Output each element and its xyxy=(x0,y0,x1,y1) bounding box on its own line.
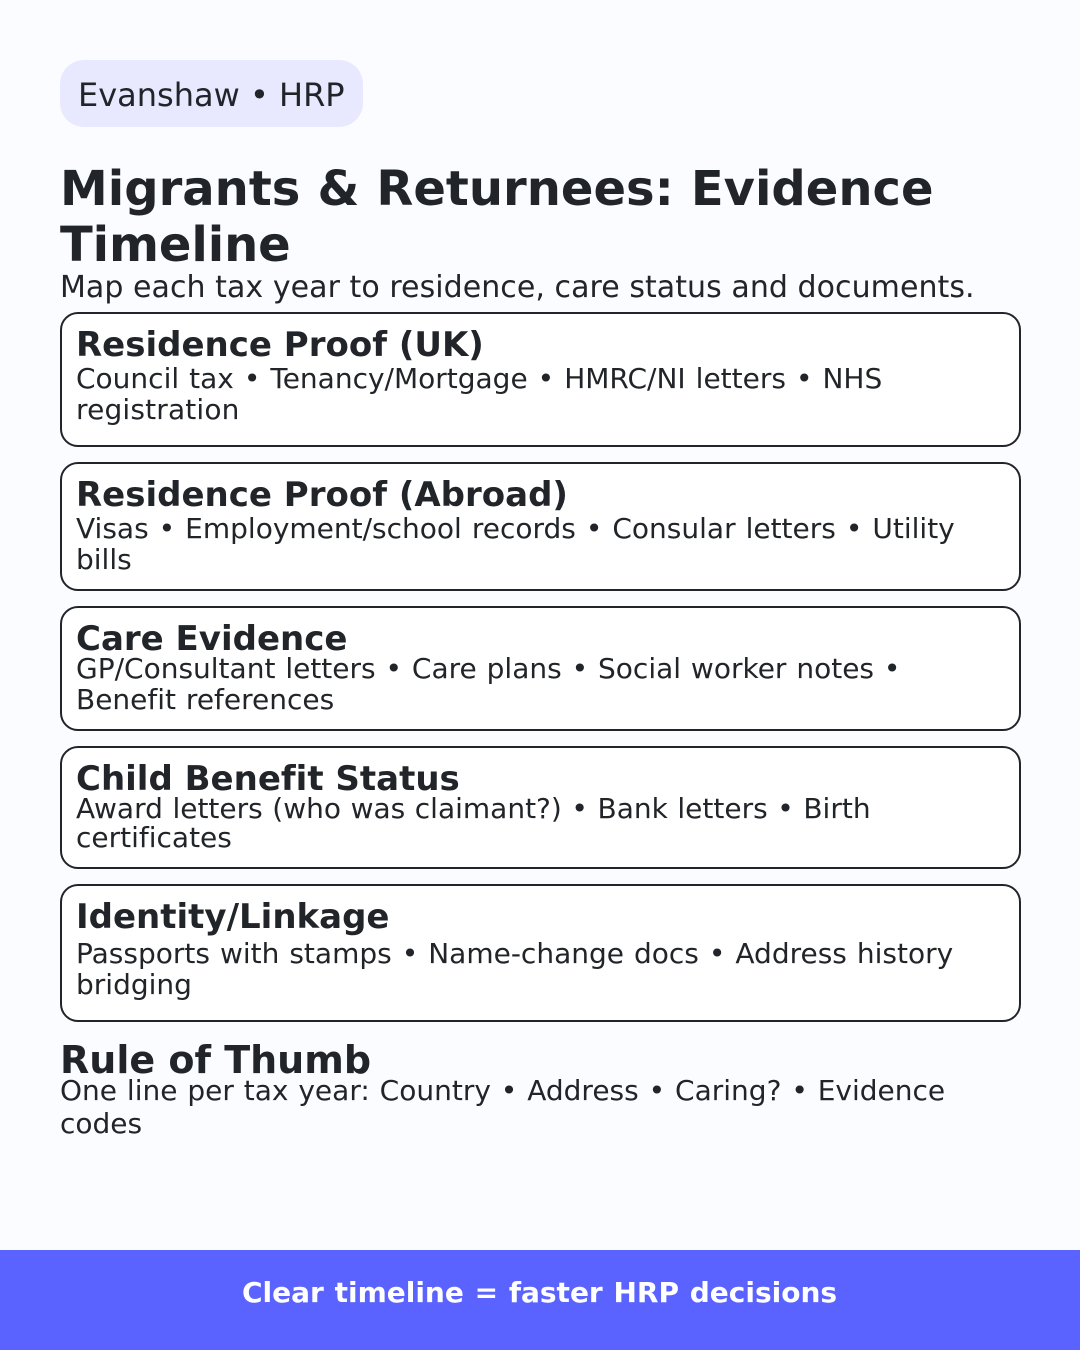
title xyxy=(60,161,934,273)
text: rule of thumb: One line per tax year: Country • Address • Caring? • Evidence xyxy=(60,1074,945,1107)
badge: Evanshaw • HRP xyxy=(78,76,345,114)
panel: identity linkage xyxy=(60,884,1021,1022)
text: care evidence: GP/Consultant letters • Care plans • Social worker notes • xyxy=(76,652,900,685)
heading: rule of thumb: Rule of Thumb xyxy=(60,1038,371,1082)
text: identity linkage xyxy=(76,937,953,1001)
panel: care evidence xyxy=(60,606,1021,731)
title: Migrants & Returnees: Evidence xyxy=(60,161,934,217)
heading: care evidence: Care Evidence xyxy=(76,619,347,659)
text: care evidence xyxy=(76,652,900,716)
badge xyxy=(60,60,363,127)
heading: identity linkage: Identity/Linkage xyxy=(76,897,389,937)
heading: child benefit status: Child Benefit Status xyxy=(76,759,460,799)
text: residence proof UK: Council tax • Tenancy/Mortgage • HMRC/NI letters • NHS xyxy=(76,362,882,395)
text: residence proof UK: registration xyxy=(76,393,240,426)
text: child benefit status: Award letters (who was claimant?) • Bank letters • Birth xyxy=(76,792,871,825)
footer banner: Clear timeline = faster HRP decisions xyxy=(242,1276,837,1309)
text: rule of thumb xyxy=(60,1074,945,1140)
text: residence proof abroad: bills xyxy=(76,543,132,576)
panel: child benefit status xyxy=(60,746,1021,869)
heading: residence proof UK: Residence Proof (UK) xyxy=(76,325,484,365)
text: residence proof UK xyxy=(76,362,882,426)
subtitle: Map each tax year to residence, care status and documents. xyxy=(60,270,975,305)
heading: residence proof abroad: Residence Proof (Abroad) xyxy=(76,475,568,515)
text: residence proof abroad xyxy=(76,512,955,576)
panel: residence proof UK xyxy=(60,312,1021,447)
text: identity linkage: Passports with stamps • Name-change docs • Address history xyxy=(76,937,953,970)
text: residence proof abroad: Visas • Employment/school records • Consular letters • Utility xyxy=(76,512,955,545)
panel: residence proof abroad xyxy=(60,462,1021,591)
footer banner xyxy=(0,1250,1080,1350)
title: Timeline xyxy=(60,217,291,273)
text: identity linkage: bridging xyxy=(76,968,192,1001)
text: care evidence: Benefit references xyxy=(76,683,334,716)
text: child benefit status: certificates xyxy=(76,821,232,854)
text: child benefit status xyxy=(76,792,871,854)
text: rule of thumb: codes xyxy=(60,1107,142,1140)
